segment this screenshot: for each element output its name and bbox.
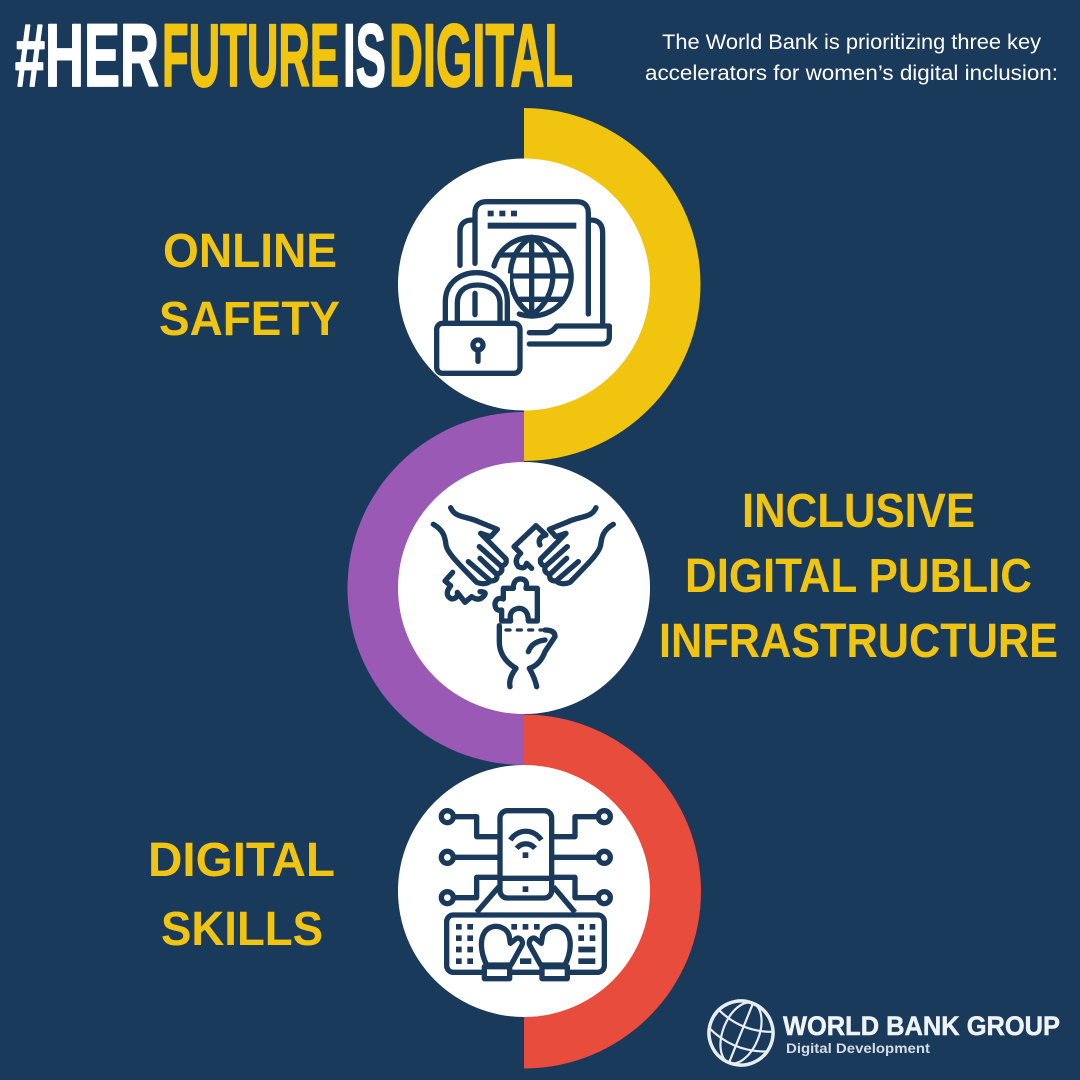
padlock: [437, 273, 520, 373]
icon: browser globe and padlock: [437, 202, 609, 373]
label: digital skills: [148, 834, 335, 956]
intro text: The World Bank is prioritizing three key: [662, 31, 1042, 54]
label: inclusive digital public infrastructure: [659, 485, 1058, 668]
label: online safety: [159, 225, 340, 346]
label: digital skills: DIGITAL: [148, 834, 335, 887]
white circle: infrastructure: [398, 462, 650, 714]
icon: globe: [699, 991, 783, 1075]
white circle: online safety: [398, 158, 650, 410]
icon: phone keyboard mittens: [441, 811, 610, 979]
title: [15, 5, 573, 105]
label: digital skills: SKILLS: [161, 903, 323, 956]
right puzzle fragment: [514, 526, 546, 568]
right mitten: [529, 926, 570, 965]
right hand: [540, 508, 613, 584]
intro text: accelerators for women’s digital inclusion:: [645, 62, 1058, 85]
red half ring: [524, 714, 701, 1068]
label: inclusive digital public infrastructure: INCLUSIVE: [742, 485, 975, 538]
yellow half ring: [524, 108, 700, 461]
title: DIGITAL: [389, 5, 573, 105]
left mitten: [481, 926, 522, 965]
title: IS: [343, 5, 386, 105]
purple half ring: [348, 412, 524, 765]
center puzzle piece: [495, 579, 537, 621]
label: inclusive digital public infrastructure: DIGITAL PUBLIC: [685, 550, 1032, 603]
logo: World Bank Group: [699, 991, 1060, 1075]
title: #HER: [15, 5, 159, 105]
title: FUTURE: [162, 5, 339, 105]
left puzzle fragment: [445, 572, 485, 602]
label: online safety: ONLINE: [163, 225, 337, 278]
label: online safety: SAFETY: [159, 293, 340, 346]
lower hand: [499, 626, 555, 687]
logo: World Bank Group: Digital Development: [786, 1040, 930, 1056]
icon: hands and puzzle: [433, 508, 613, 687]
left hand: [433, 508, 506, 584]
logo: World Bank Group: WORLD BANK GROUP: [783, 1011, 1060, 1041]
white circle: digital skills: [398, 765, 650, 1017]
intro text: [645, 31, 1058, 85]
